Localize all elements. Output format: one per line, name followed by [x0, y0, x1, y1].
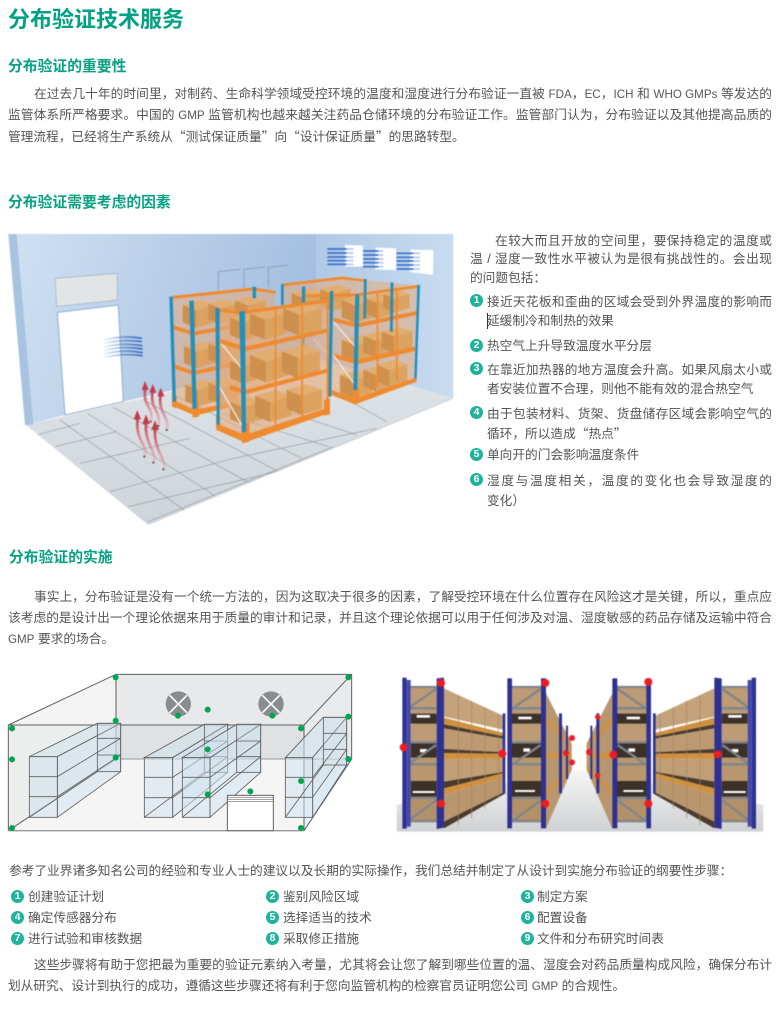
- shelf unit D: [285, 717, 347, 817]
- problem 3: 在靠近加热器的地方温度会升高。如果风扇太小或: [487, 363, 772, 377]
- problem 6: 变化）: [487, 494, 525, 508]
- step 8: 8: [270, 932, 275, 944]
- sensors: green dots: [9, 674, 351, 831]
- step 3: 制定方案: [537, 890, 588, 904]
- text block: closing paragraph: [8, 958, 772, 993]
- step 2: 鉴别风险区域: [283, 890, 359, 904]
- step 9: 文件和分布研究时间表: [537, 932, 664, 946]
- heading: importance: 分布验证的重要性: [8, 59, 126, 75]
- problem 4: 4: [474, 406, 479, 418]
- text block: implementation paragraph: 该考虑的是设计出一个理论依据来用于质量的审计和记录，并且这个理论依据可以用于任何涉及对温、湿度敏感的药品存储及运输中符合: [8, 611, 772, 625]
- step 4: 4: [15, 911, 20, 923]
- text block: closing paragraph: 这些步骤将有助于您把最为重要的验证元素纳入考量，尤其将会让您了解到哪些位置的温、湿度会对药品质量构成风险，确保分布计: [34, 958, 772, 972]
- floor: [26, 358, 453, 525]
- problem 5: 5: [474, 448, 479, 460]
- title: 分布验证技术服务: [8, 7, 184, 32]
- step 7: 7: [15, 932, 20, 944]
- problem 1: 1: [474, 294, 479, 306]
- step 1: 创建验证计划: [28, 890, 104, 904]
- problem 6: 6: [474, 473, 479, 485]
- heading: factors: 分布验证需要考虑的因素: [8, 195, 171, 211]
- problem 2: 2: [474, 339, 479, 351]
- list: steps: [11, 890, 664, 946]
- text block: intro to problems: 温 / 湿度一致性水平被认为是很有挑战性的。会出现: [470, 252, 772, 266]
- sensors: red dots: [400, 678, 722, 808]
- text block: steps intro: 参考了业界诸多知名公司的经验和专业人士的建议以及长期的实际操作，我们总结并制定了从设计到实施分布验证的纲要性步骤：: [9, 864, 732, 878]
- step 6: 配置设备: [537, 911, 588, 925]
- rack: right back: [281, 277, 420, 404]
- problem 1: 延缓制冷和制热的效果: [487, 314, 614, 328]
- text block: implementation paragraph: [8, 590, 772, 646]
- step 6: 6: [525, 911, 530, 923]
- text block: intro to problems: 在较大而且开放的空间里，要保持稳定的温度或: [495, 234, 772, 248]
- door: [57, 305, 123, 415]
- problem 1: 接近天花板和歪曲的区域会受到外界温度的影响而: [487, 295, 772, 309]
- left rack stacks: [402, 678, 572, 829]
- diagram: room sensor placement: [8, 674, 352, 832]
- problem 3: 3: [474, 362, 479, 374]
- text block: closing paragraph: 划从研究、设计到执行的成功，遵循这些步骤还将有利于您向监管机构的检察官员证明您公司 GMP 的合规性。: [8, 979, 625, 993]
- left wall edge: [8, 234, 33, 425]
- problem 1: [470, 294, 772, 328]
- text block: intro to problems: 的问题包括：: [470, 271, 546, 285]
- pipes: [218, 265, 287, 290]
- floor and backdrop: [397, 770, 763, 832]
- room walls: [8, 674, 352, 831]
- diagram: warehouse aisle sensor placement: [396, 676, 764, 832]
- text block: importance paragraph: 在过去几十年的时间里，对制药、生命科学领域受控环境的温度和湿度进行分布验证一直被 FDA，EC，ICH 和 WHO GMPs 等发达的: [34, 87, 772, 101]
- text block: importance paragraph: 监管体系所严格要求。中国的 GMP 监管机构也越来越关注药品仓储环境的分布验证工作。监管部门认为，分布验证以及其他提高品质的: [8, 108, 772, 122]
- door window: [55, 273, 117, 307]
- problem 6: [470, 473, 772, 508]
- rack: left back: [169, 287, 276, 418]
- icon: air flow from door: [104, 337, 143, 357]
- back wall: [17, 234, 317, 425]
- shelf unit C: [182, 724, 261, 817]
- rack: front: [215, 299, 330, 443]
- icon: vents and air flow: [327, 245, 433, 275]
- heading: implementation: 分布验证的实施: [9, 550, 113, 566]
- text block: importance paragraph: [8, 87, 772, 145]
- shelf unit B: [144, 724, 228, 817]
- icon: fans: [166, 691, 284, 717]
- step 9: 9: [525, 932, 530, 944]
- step 8: 采取修正措施: [283, 932, 359, 946]
- problem 6: 湿度与温度相关，温度的变化也会导致湿度的: [487, 474, 772, 488]
- step 4: 确定传感器分布: [28, 911, 117, 925]
- step 3: 3: [525, 890, 530, 902]
- problem 4: [470, 406, 772, 442]
- text block: intro to problems: [470, 234, 772, 285]
- text block: implementation paragraph: 事实上，分布验证是没有一个统一方法的，因为这取决于很多的因素，了解受控环境在什么位置存在风险这才是关键，所以，重点应: [34, 590, 772, 604]
- icon: rising hot air arrows: [134, 381, 168, 470]
- step 1: 1: [15, 890, 20, 902]
- text block: implementation paragraph: GMP 要求的场合。: [8, 632, 114, 646]
- step 7: 进行试验和审核数据: [28, 932, 142, 946]
- problem 4: 循环，所以造成“热点”: [487, 423, 627, 442]
- step 5: 选择适当的技术: [283, 911, 372, 925]
- problem 2: 热空气上升导致温度水平分层: [487, 339, 652, 353]
- list: problems: [470, 294, 772, 508]
- right rack stacks: [587, 678, 756, 829]
- illustration: warehouse room: [8, 234, 454, 526]
- problem 4: 由于包装材料、货架、货盘储存区域会影响空气的: [487, 407, 772, 421]
- problem 5: 单向开的门会影响温度条件: [487, 448, 639, 462]
- step 2: 2: [270, 890, 275, 902]
- step 5: 5: [270, 911, 275, 923]
- text block: importance paragraph: 管理流程，已经将生产系统从“测试保证质量”向“设计保证质量”的思路转型。: [8, 126, 465, 145]
- heater: [227, 795, 273, 831]
- problem 3: 者安装位置不合理，则他不能有效的混合热空气: [487, 382, 753, 396]
- shelf unit A: [29, 723, 121, 817]
- problem 3: [470, 362, 772, 396]
- right wall: [317, 234, 453, 398]
